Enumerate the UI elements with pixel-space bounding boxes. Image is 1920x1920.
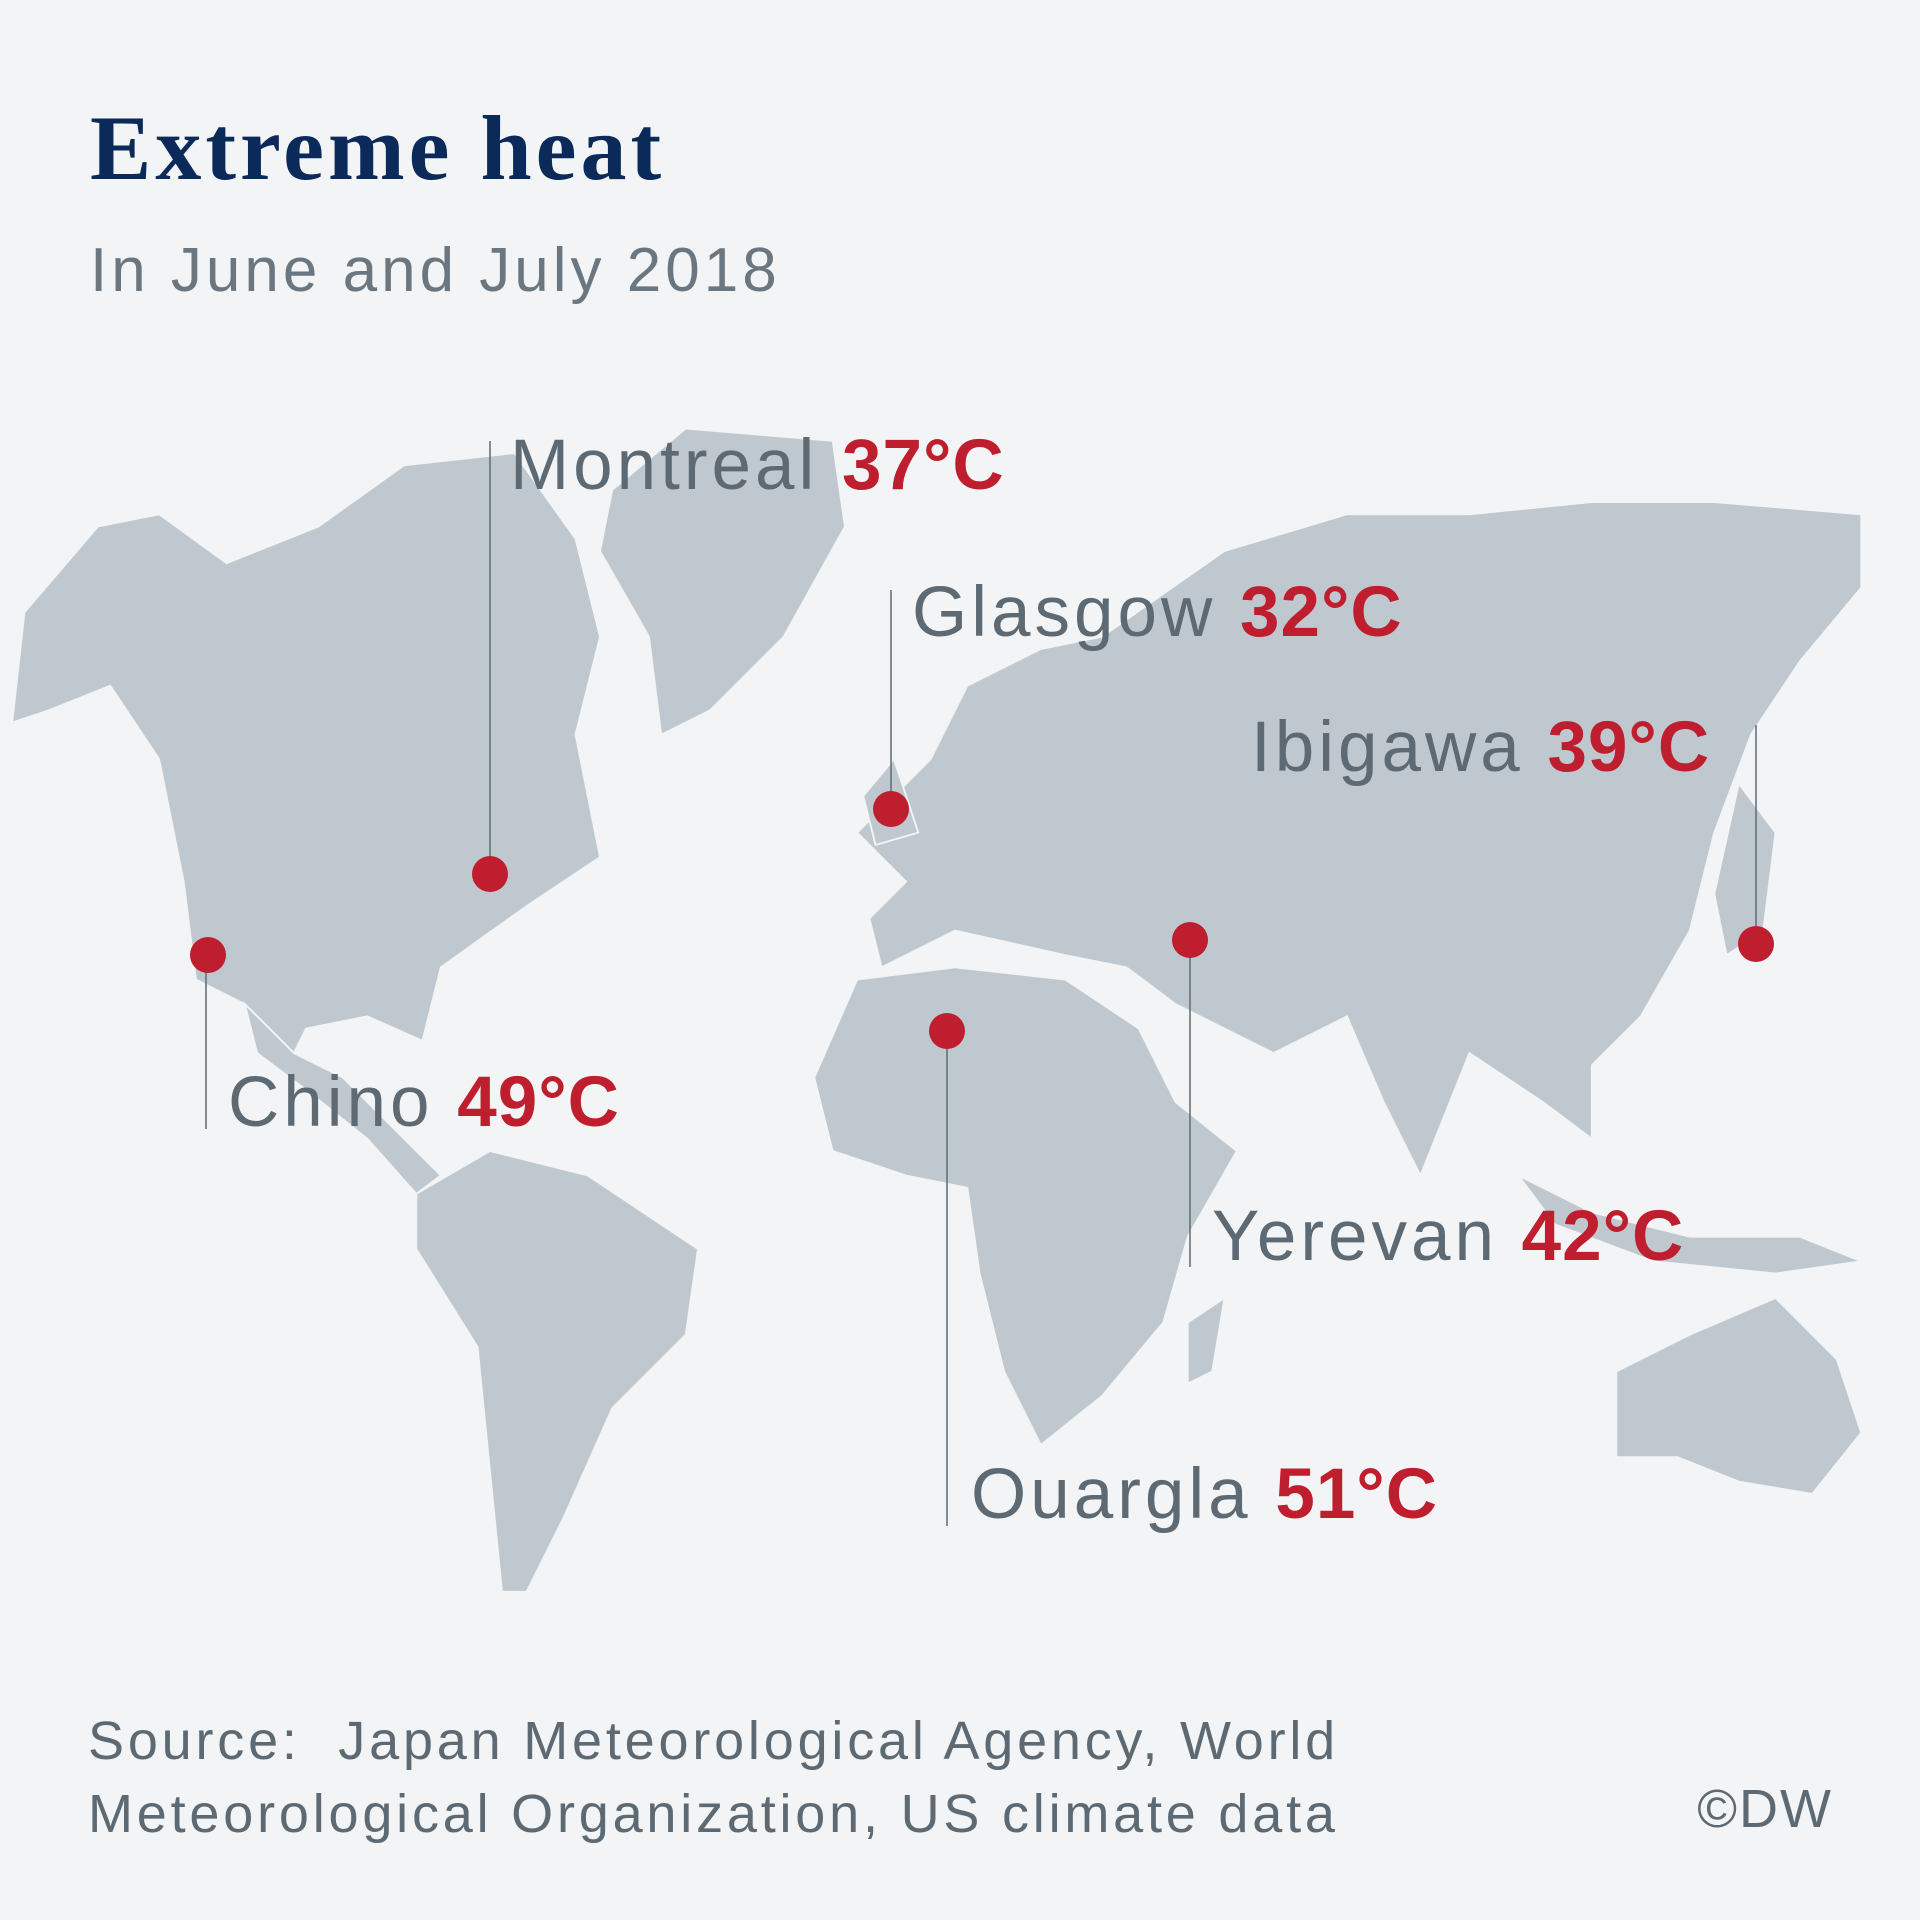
label: Ouargla: Ouargla 51°C [971,1455,1438,1534]
label: Montreal: Montreal 37°C [510,426,1005,505]
source [88,1711,1339,1844]
label: Ibigawa: Ibigawa 39°C [1251,708,1710,787]
label: Glasgow: Glasgow 32°C [912,573,1403,652]
source: Source: Japan Meteorological Agency, World [88,1711,1339,1771]
credit: ©DW [1697,1779,1833,1839]
title: Extreme heat [90,97,665,199]
subtitle: In June and July 2018 [90,236,781,305]
source: Meteorological Organization, US climate data [88,1784,1339,1844]
label: Chino: Chino 49°C [228,1063,620,1142]
label: Yerevan: Yerevan 42°C [1212,1197,1684,1276]
